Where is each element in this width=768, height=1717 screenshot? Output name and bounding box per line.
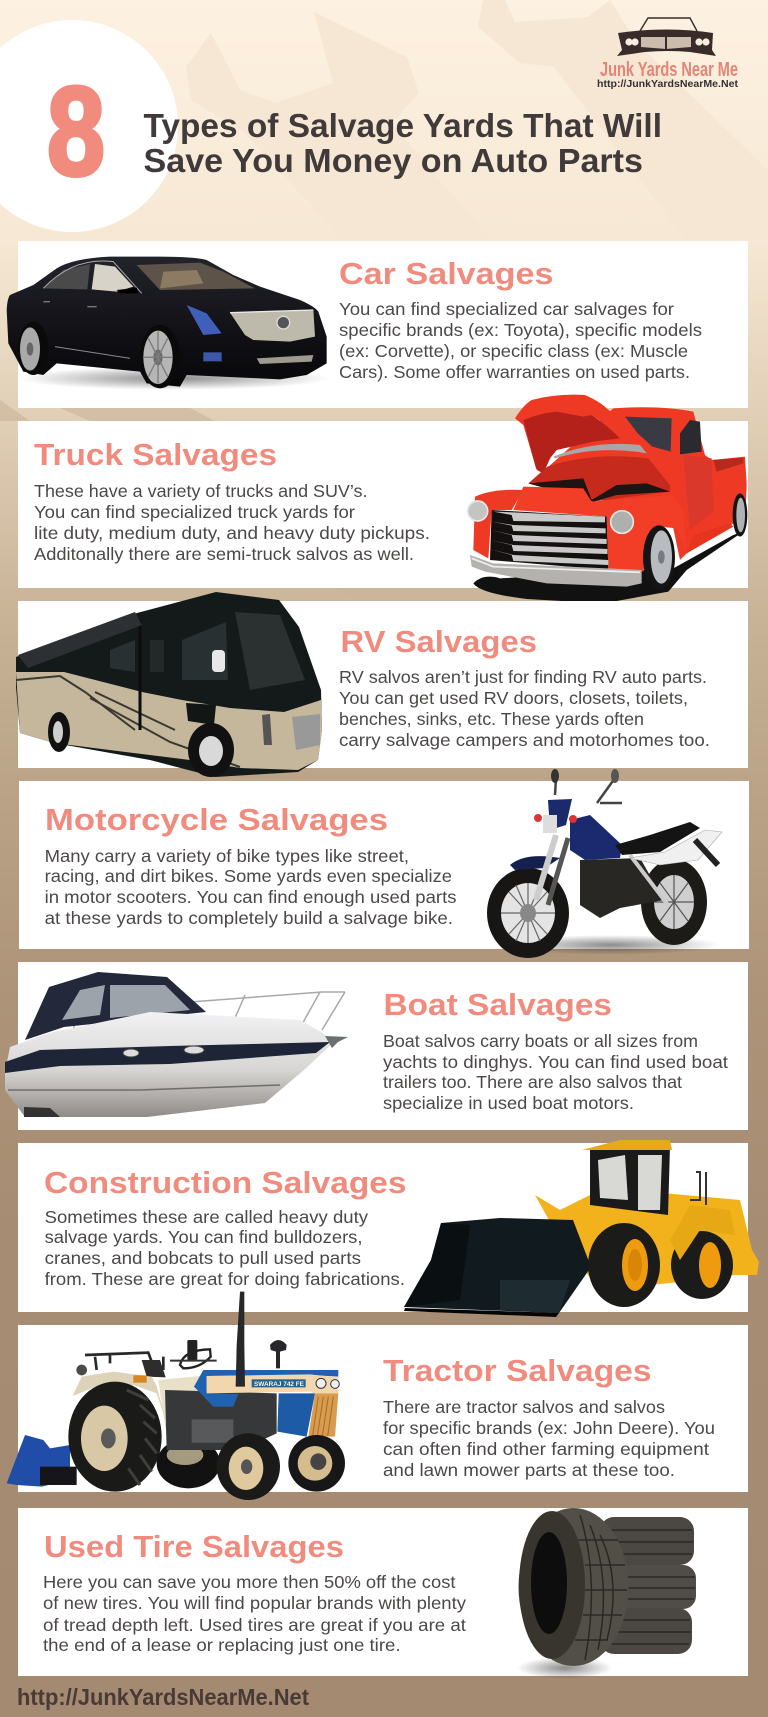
- text block: Cars). Some offer warranties on used parts.: [339, 362, 690, 382]
- heading: Truck Salvages: [34, 437, 277, 472]
- text block: [339, 667, 710, 750]
- heading: Used Tire Salvages: [44, 1529, 344, 1564]
- heading: RV Salvages: [340, 624, 537, 659]
- panel: Motorcycle Salvages: [19, 769, 749, 958]
- text block: salvage yards. You can find bulldozers,: [45, 1227, 362, 1247]
- icon: classic car front: [617, 18, 716, 56]
- text block: for specific brands (ex: John Deere). You: [383, 1418, 715, 1438]
- text block: RV salvos aren’t just for finding RV auto parts.: [339, 667, 707, 687]
- text block: These have a variety of trucks and SUV’s.: [34, 481, 368, 501]
- icon: motor boat: [5, 972, 348, 1117]
- decorative white circle behind the number: [0, 20, 178, 232]
- text block: racing, and dirt bikes. Some yards even specialize: [45, 866, 452, 886]
- text block: There are tractor salvos and salvos: [383, 1397, 665, 1417]
- title: Save You Money on Auto Parts: [144, 142, 643, 179]
- text block: [43, 1572, 466, 1655]
- heading: Car Salvages: [339, 256, 554, 291]
- text block: You can find specialized truck yards for: [34, 502, 355, 522]
- icon: stack of tires: [517, 1508, 696, 1679]
- heading: Tractor Salvages: [383, 1353, 652, 1388]
- panel: Tractor Salvages: [7, 1292, 748, 1500]
- text block: specialize in used boat motors.: [383, 1093, 634, 1113]
- title: [144, 107, 662, 179]
- text block: cranes, and bobcats to pull used parts: [45, 1248, 361, 1268]
- panel: Construction Salvages: [18, 1140, 759, 1317]
- text block: [45, 1207, 405, 1289]
- panel: Used Tire Salvages: [18, 1508, 748, 1679]
- text block: the end of a lease or replacing just one tire.: [43, 1635, 401, 1655]
- heading: Boat Salvages: [384, 987, 612, 1022]
- text block: carry salvage campers and motorhomes too.: [339, 730, 710, 750]
- icon: wheel loader: [404, 1140, 759, 1317]
- text block: You can get used RV doors, closets, toilets,: [339, 688, 688, 708]
- text block: Sometimes these are called heavy duty: [45, 1207, 368, 1227]
- text block: in motor scooters. You can find enough used parts: [45, 887, 457, 907]
- text block: lite duty, medium duty, and heavy duty pickups.: [34, 523, 430, 543]
- text block: Here you can save you more then 50% off the cost: [43, 1572, 456, 1592]
- text block: [383, 1397, 715, 1480]
- text block: of tread depth left. Used tires are great if you are at: [43, 1615, 466, 1635]
- text block: [45, 846, 457, 928]
- panel: Boat Salvages: [5, 962, 748, 1130]
- text block: can often find other farming equipment: [383, 1439, 709, 1459]
- number 8: 8: [47, 61, 105, 202]
- text block: Additonally there are semi-truck salvos as well.: [34, 544, 414, 564]
- text block: trailers too. There are also salvos that: [383, 1072, 682, 1092]
- text block: [34, 481, 430, 564]
- text block: benches, sinks, etc. These yards often: [339, 709, 644, 729]
- panel: Car Salvages: [7, 241, 748, 408]
- text block: Many carry a variety of bike types like street,: [45, 846, 409, 866]
- icon: red pickup truck: [468, 395, 747, 603]
- icon: dirt bike: [487, 769, 722, 958]
- logo url: http://JunkYardsNearMe.Net: [597, 78, 738, 90]
- heading: Motorcycle Salvages: [45, 802, 388, 837]
- text block: (ex: Corvette), or specific class (ex: Muscle: [339, 341, 688, 361]
- text block: and lawn mower parts at these too.: [383, 1460, 675, 1480]
- text block: of new tires. You will find popular brands with plenty: [43, 1593, 466, 1613]
- text block: specific brands (ex: Toyota), specific models: [339, 320, 702, 340]
- text block: Boat salvos carry boats or all sizes from: [383, 1031, 698, 1051]
- text block: at these yards to completely build a salvage bike.: [45, 908, 453, 928]
- footer url: http://JunkYardsNearMe.Net: [17, 1684, 309, 1710]
- logo: Junk Yards Near Me: [597, 18, 738, 90]
- icon: tractor: [7, 1292, 345, 1500]
- text block: You can find specialized car salvages for: [339, 299, 674, 319]
- heading: Construction Salvages: [44, 1165, 406, 1200]
- icon: RV motorhome: [16, 592, 322, 777]
- text block: yachts to dinghys. You can find used boat: [383, 1052, 728, 1072]
- icon: black car: [7, 257, 330, 390]
- title: Types of Salvage Yards That Will: [144, 107, 662, 144]
- text block: from. These are great for doing fabrications.: [45, 1269, 405, 1289]
- panel: RV Salvages: [16, 592, 748, 777]
- icon: tractor: SWARAJ 742 FE: [254, 1381, 304, 1388]
- text block: [339, 299, 702, 382]
- text block: [383, 1031, 728, 1113]
- panel: Truck Salvages: [18, 395, 748, 603]
